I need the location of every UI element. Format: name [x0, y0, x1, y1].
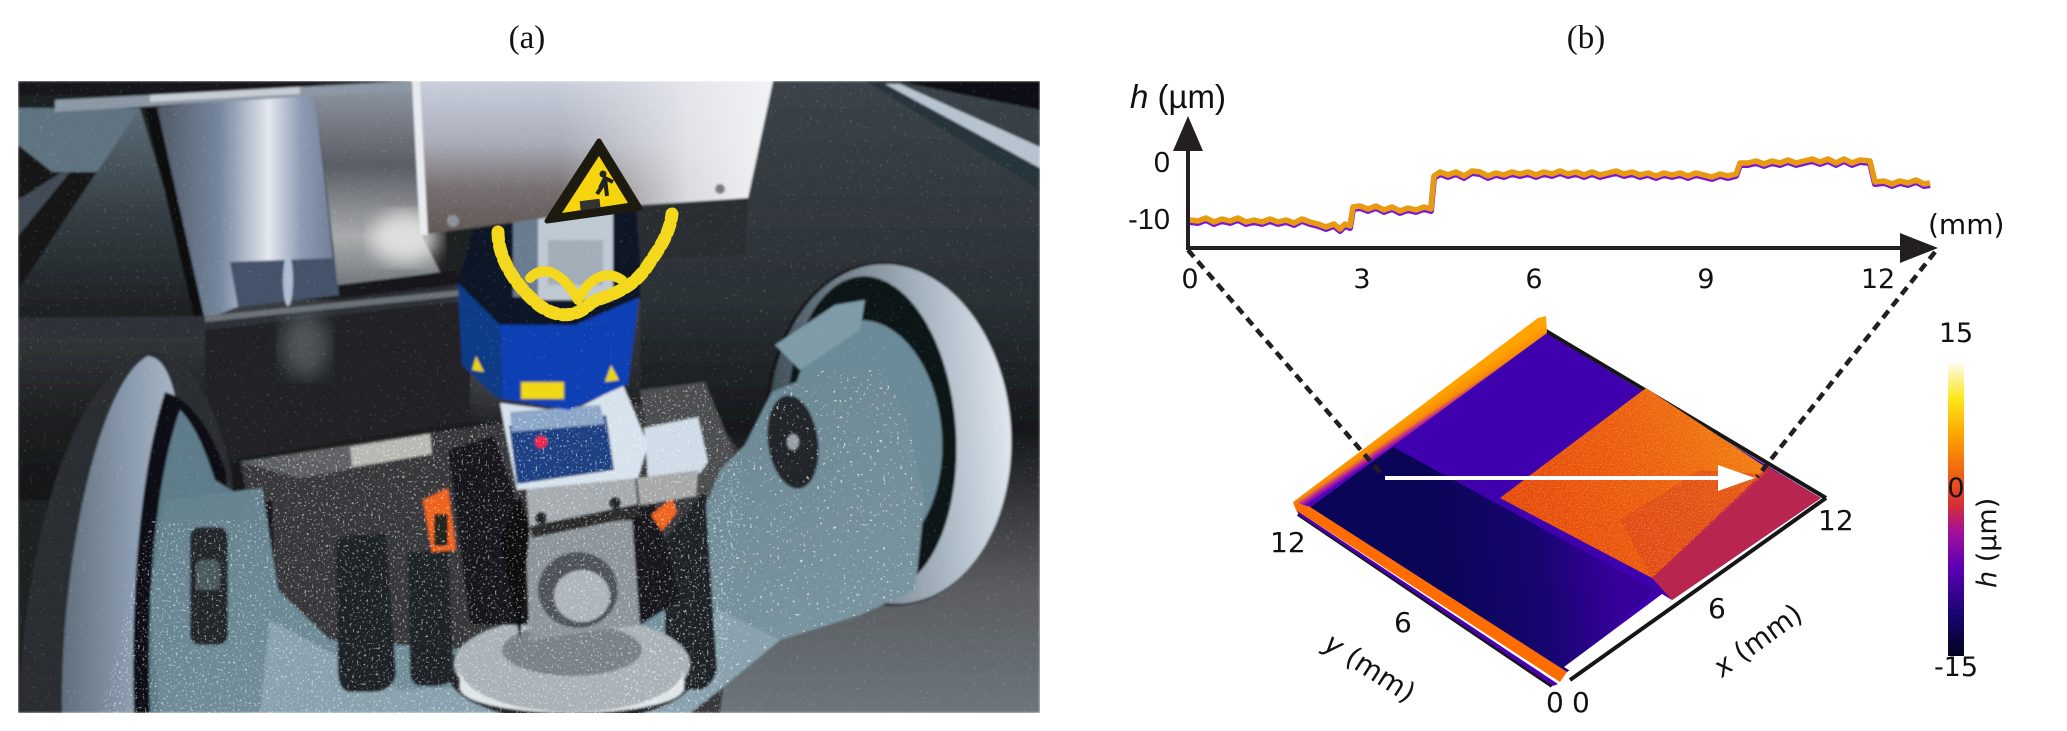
panel label (a): (a) [509, 20, 545, 56]
x tick labels: 12 [1861, 264, 1895, 295]
y side labels: 12 [1270, 526, 1306, 559]
magenta plateau [1652, 467, 1821, 600]
milled workpiece with laser dot [500, 385, 708, 505]
machine enclosure walls [18, 81, 1040, 713]
profile curve purple underlay [1190, 161, 1930, 231]
orange ridge top-left [1293, 316, 1547, 507]
dashed connector left [1188, 250, 1384, 477]
navy band [1310, 447, 1655, 672]
colour bar legend: h (µm) [1972, 498, 2003, 588]
blue sensor housing [458, 205, 640, 410]
colour bar legend: 15 [1939, 318, 1973, 349]
orange ridge lower-left [1293, 502, 1567, 682]
colour bar legend: -15 [1934, 652, 1978, 683]
colour bar legend [1934, 318, 2003, 683]
x axis unit: (mm) [1928, 208, 2004, 241]
x tick labels: 9 [1697, 264, 1715, 295]
x tick labels: 3 [1353, 264, 1371, 295]
chart: height profile [1128, 78, 2004, 295]
trunnion yoke body [150, 368, 925, 713]
x tick labels [1181, 264, 1895, 295]
colour bar legend: 0 [1947, 473, 1965, 504]
purple plane [1310, 333, 1821, 672]
x axis arrow [1186, 233, 1938, 263]
y side labels [1270, 526, 1422, 709]
darker patch on plateau [1620, 470, 1764, 578]
plateau noise texture [1500, 388, 1770, 578]
x side labels [1546, 504, 1854, 719]
x side labels: x (mm) [1706, 597, 1809, 684]
spindle housing block [412, 81, 773, 260]
panel: machine photograph illustration [18, 81, 1040, 722]
white metal chips speckle [18, 81, 1040, 713]
x side labels: 12 [1818, 504, 1854, 537]
y tick labels: 0 [1154, 147, 1170, 179]
dashed connector right [1757, 252, 1935, 477]
y tick labels [1128, 147, 1170, 236]
right trunnion disc [768, 262, 1014, 607]
spindle column [513, 205, 640, 300]
x side labels: 0 [1572, 686, 1590, 719]
y tick labels: -10 [1128, 204, 1170, 236]
profile curve orange [1190, 159, 1930, 229]
edge lines [1298, 331, 1826, 686]
chip-covered floor [239, 381, 738, 713]
x side labels: 6 [1708, 592, 1726, 625]
white scan arrow [1385, 465, 1755, 491]
purple strip below lower-left ridge [1296, 510, 1558, 686]
yellow coolant hoses [498, 214, 672, 315]
y side labels: 6 [1394, 606, 1412, 639]
y axis title: h (µm) [1130, 78, 1226, 115]
x tick labels: 0 [1181, 264, 1199, 295]
white edge [1564, 594, 1672, 672]
orange plateau [1500, 388, 1770, 578]
left trunnion disc [20, 352, 280, 713]
chart: 3D surface height map [1188, 250, 1935, 719]
rotary table and clamps [423, 436, 697, 722]
y axis arrow [1173, 116, 1203, 250]
x side labels: 0 [1546, 686, 1564, 719]
x tick labels: 6 [1525, 264, 1543, 295]
panel label (b): (b) [1567, 20, 1605, 56]
y side labels: y (mm) [1317, 626, 1422, 709]
icon: yellow warning sign [547, 141, 640, 221]
